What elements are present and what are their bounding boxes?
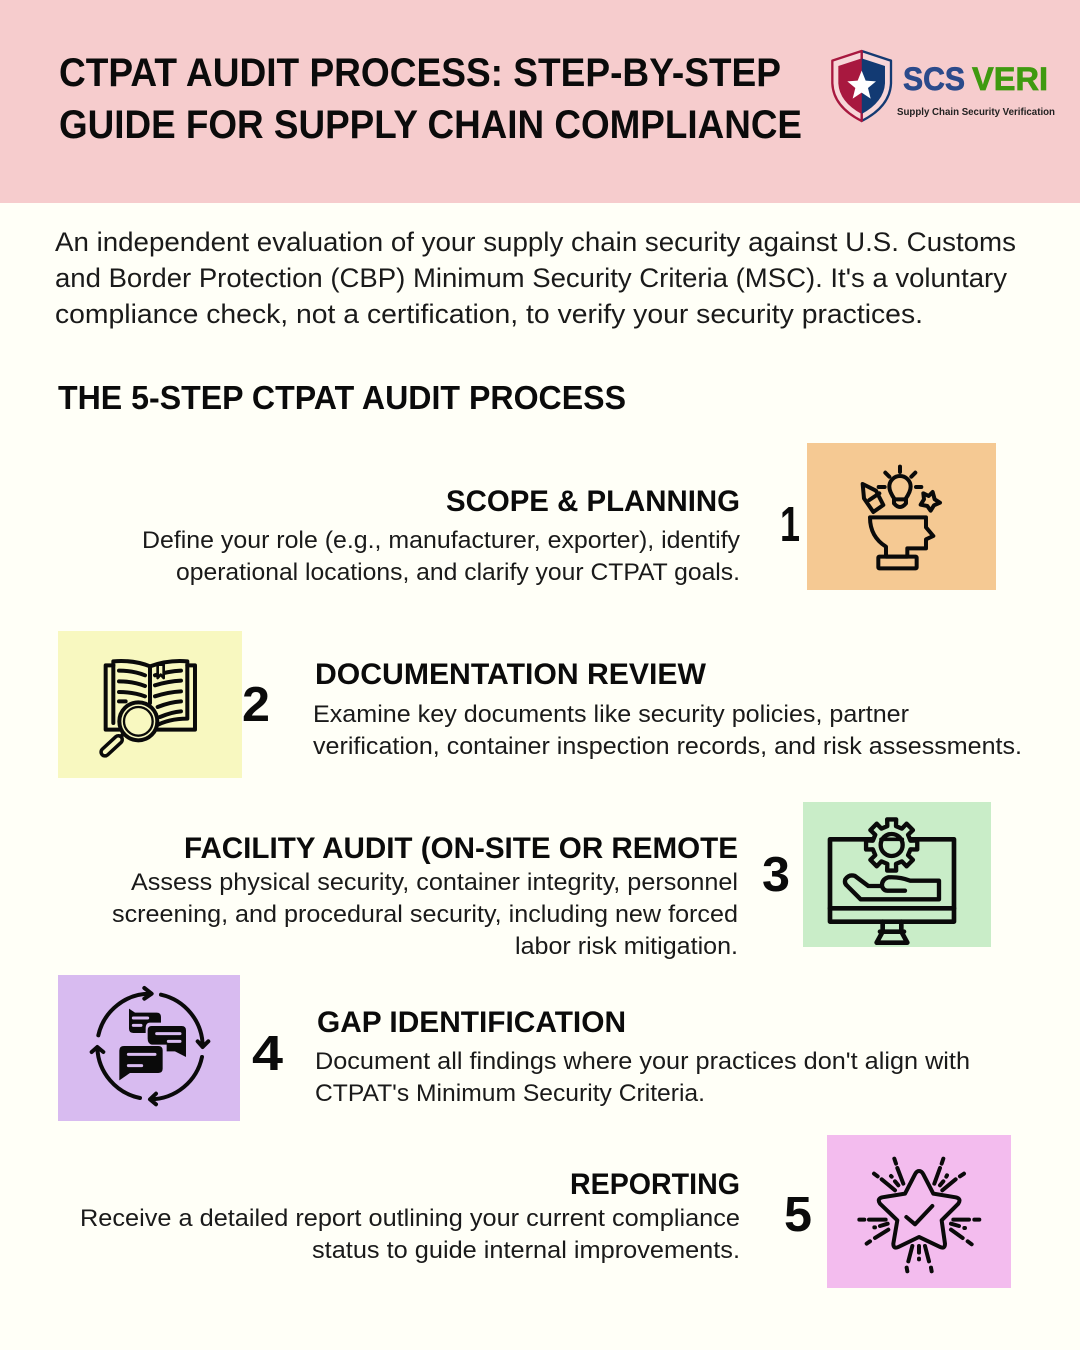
- logo: SCS VERI: VERI: [972, 61, 1048, 97]
- logo tagline: Supply Chain Security Verification: [897, 107, 1055, 118]
- icon: monitor with gear and hand: [830, 819, 954, 943]
- step 4 description: [315, 1048, 970, 1107]
- panel: step 2 documentation review: [58, 631, 1022, 778]
- header banner: [0, 0, 1080, 203]
- step 3 icon tile: [803, 802, 991, 947]
- step 4 number: 4: [252, 1027, 283, 1081]
- logo wordmark: SCS: [903, 61, 965, 97]
- icon: shield with star: [832, 51, 891, 121]
- step 4 description: Document all findings where your practices don't align with: [315, 1048, 970, 1075]
- step 1 number: 1: [780, 498, 800, 552]
- step 3 description: labor risk mitigation.: [515, 933, 738, 960]
- intro text block: and Border Protection (CBP) Minimum Security Criteria (MSC). It's a voluntary: [55, 263, 1007, 293]
- step 4 description: CTPAT's Minimum Security Criteria.: [315, 1080, 705, 1107]
- step 3 heading: FACILITY AUDIT (ON-SITE OR REMOTE: [184, 832, 738, 865]
- step 2 description: verification, container inspection records, and risk assessments.: [313, 733, 1022, 760]
- step 1 description: [142, 527, 741, 586]
- step 2 icon tile: [58, 631, 242, 778]
- step 3 description: [112, 869, 738, 960]
- icon: open book with magnifying glass: [105, 661, 195, 752]
- title: [59, 51, 802, 147]
- step 1 description: operational locations, and clarify your CTPAT goals.: [176, 559, 740, 586]
- panel: step 3 facility audit: [112, 802, 991, 960]
- intro text block: compliance check, not a certification, to verify your security practices.: [55, 299, 923, 329]
- step 2 description: [313, 701, 1022, 760]
- step 5 description: status to guide internal improvements.: [312, 1237, 740, 1264]
- title: GUIDE FOR SUPPLY CHAIN COMPLIANCE: [59, 103, 802, 147]
- panel: step 4 gap identification: [58, 975, 970, 1121]
- step 2 number: 2: [242, 678, 270, 732]
- step 3 number: 3: [762, 848, 790, 902]
- step 2 description: Examine key documents like security policies, partner: [313, 701, 909, 728]
- section heading: THE 5-STEP CTPAT AUDIT PROCESS: [58, 379, 626, 416]
- step 5 icon tile: [827, 1135, 1011, 1288]
- panel: step 5 reporting: [80, 1135, 1011, 1288]
- title: CTPAT AUDIT PROCESS: STEP-BY-STEP: [59, 51, 781, 95]
- panel: step 1 scope and planning: [142, 443, 996, 590]
- step 1 description: Define your role (e.g., manufacturer, exporter), identify: [142, 527, 741, 554]
- icon: chat bubbles inside cycle arrows: [92, 988, 208, 1104]
- step 4 icon tile: [58, 975, 240, 1121]
- step 2 heading: DOCUMENTATION REVIEW: [315, 658, 707, 691]
- step 1 heading: SCOPE & PLANNING: [446, 485, 740, 518]
- step 5 description: [80, 1205, 740, 1264]
- icon: star with check mark and rays: [859, 1159, 979, 1271]
- step 3 description: Assess physical security, container integrity, personnel: [131, 869, 738, 896]
- intro text block: [55, 227, 1016, 329]
- step 5 description: Receive a detailed report outlining your current compliance: [80, 1205, 740, 1232]
- step 1 icon tile: [807, 443, 996, 590]
- step 3 description: screening, and procedural security, including new forced: [112, 901, 738, 928]
- icon: head with lightbulb, pencil and star: [863, 467, 940, 568]
- step 5 heading: REPORTING: [570, 1168, 740, 1201]
- logo: SCS VERI: [832, 51, 1055, 121]
- step 5 number: 5: [784, 1188, 812, 1242]
- chat bubbles: [119, 1009, 186, 1080]
- intro text block: An independent evaluation of your supply chain security against U.S. Customs: [55, 227, 1016, 257]
- step 4 heading: GAP IDENTIFICATION: [317, 1006, 626, 1039]
- cycle arrows: [92, 988, 208, 1104]
